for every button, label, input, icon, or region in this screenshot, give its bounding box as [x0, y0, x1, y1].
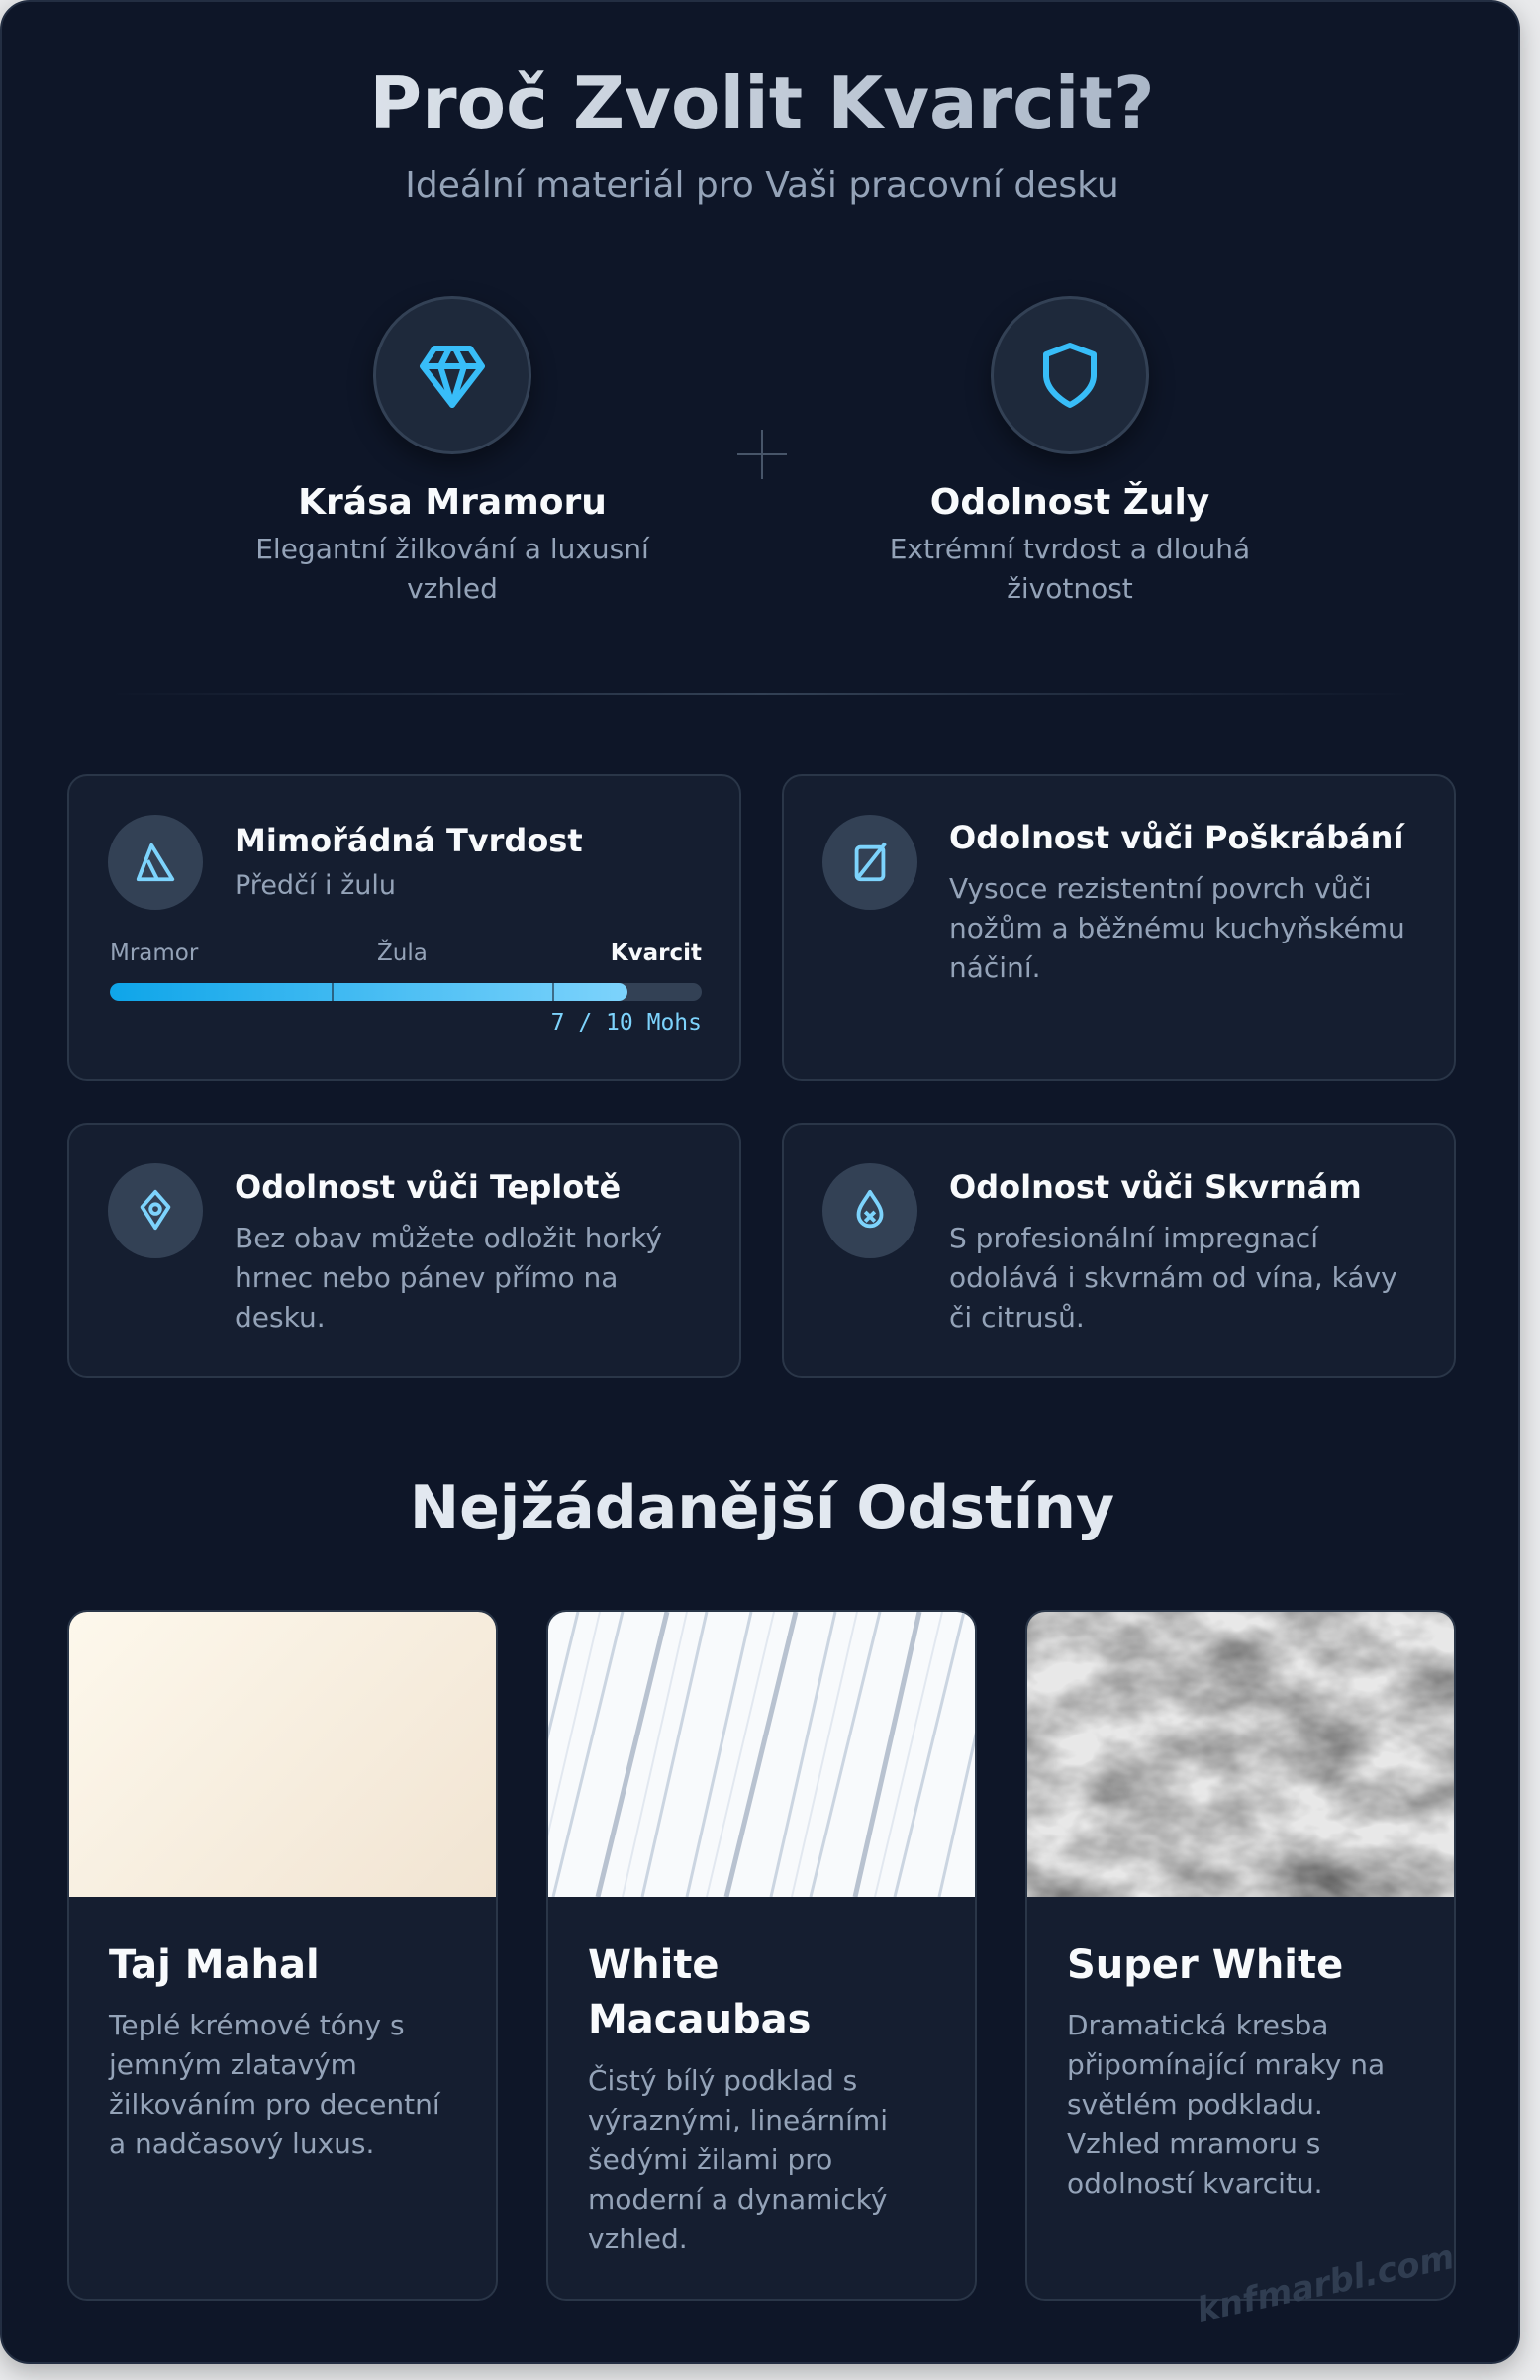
White Macaubas text: Čistý bílý podklad s výraznými, lineárními šedými žilami pro moderní a dynamický vzhled.	[588, 2064, 888, 2255]
shade card: Super White	[1025, 1610, 1456, 2301]
feature: marble beauty: Elegantní žilkování a luxusní	[255, 533, 649, 565]
feature: granite durability: životnost	[1007, 572, 1133, 605]
swatch: white with gray veins	[548, 1612, 975, 1897]
icon: scratch	[822, 815, 917, 910]
White Macaubas title	[588, 1942, 811, 2042]
watermark: knfmarbl.com	[1194, 2237, 1458, 2330]
Taj Mahal title: Taj Mahal	[109, 1942, 320, 1988]
Taj Mahal text: Teplé krémové tóny s jemným zlatavým žilkováním pro decentní a nadčasový luxus.	[109, 2009, 440, 2160]
card: heat resistance	[67, 1123, 741, 1378]
hardness bar chart	[110, 939, 702, 1036]
title: Proč Zvolit Kvarcit?	[369, 61, 1155, 145]
icon: shield	[991, 296, 1149, 454]
hardness bar chart: Kvarcit	[611, 941, 702, 966]
feature: marble beauty: vzhled	[407, 572, 498, 605]
shade card: White Macaubas	[546, 1610, 977, 2301]
Super White title: Super White	[1067, 1942, 1343, 1988]
feature: granite durability	[890, 481, 1250, 605]
hardness bar chart: Mramor	[110, 941, 198, 966]
icon: diamond	[373, 296, 531, 454]
card: hardness	[67, 774, 741, 1081]
Super White text: Dramatická kresba připomínající mraky na světlém podkladu. Vzhled mramoru s odolností kvarcitu.	[1067, 2009, 1385, 2200]
White Macaubas title: White	[588, 1942, 720, 1988]
feature: marble beauty: Krása Mramoru	[298, 482, 607, 523]
icon: heat	[108, 1163, 203, 1258]
stain title: Odolnost vůči Skvrnám	[949, 1168, 1362, 1206]
hardness title: Mimořádná Tvrdost	[235, 822, 583, 859]
icon: drop	[822, 1163, 917, 1258]
hardness subtitle: Předčí i žulu	[235, 870, 396, 901]
swatch: cream	[69, 1612, 500, 1897]
heat text: Bez obav můžete odložit horký hrnec nebo pánev přímo na desku.	[235, 1222, 662, 1334]
feature: granite durability: Extrémní tvrdost a dlouhá	[890, 533, 1250, 565]
plus sign	[737, 430, 787, 479]
feature: granite durability: Odolnost Žuly	[930, 482, 1209, 523]
card: stain resistance	[782, 1123, 1456, 1378]
White Macaubas title: Macaubas	[588, 1997, 811, 2042]
scratch title: Odolnost vůči Poškrábání	[949, 819, 1403, 856]
icon: triangle	[108, 815, 203, 910]
title	[2, 53, 1522, 152]
section heading: Nejžádanější Odstíny	[410, 1473, 1114, 1542]
scratch text: Vysoce rezistentní povrch vůči nožům a běžnému kuchyňskému náčiní.	[949, 872, 1405, 984]
shade card: Taj Mahal	[67, 1610, 498, 2301]
card: scratch resistance	[782, 774, 1456, 1081]
heat title: Odolnost vůči Teplotě	[235, 1168, 621, 1206]
subtitle: Ideální materiál pro Vaši pracovní desku	[405, 165, 1119, 206]
hardness bar chart: 7 / 10 Mohs	[551, 1010, 702, 1036]
hardness bar chart: Žula	[377, 941, 428, 966]
feature: marble beauty	[255, 482, 649, 605]
swatch: cloudy marble	[1027, 1612, 1454, 1897]
stain text: S profesionální impregnací odolává i skvrnám od vína, kávy či citrusů.	[949, 1222, 1397, 1334]
